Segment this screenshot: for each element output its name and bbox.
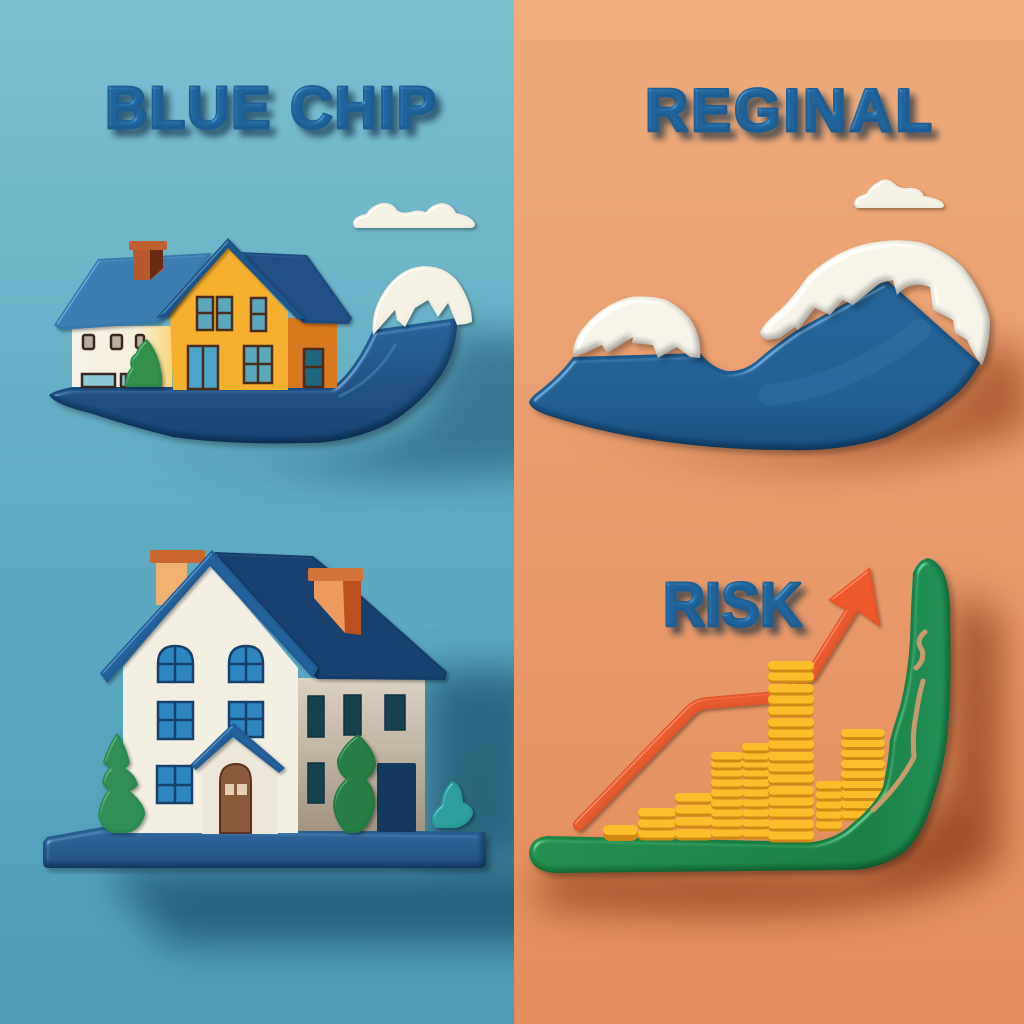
- left annex: [72, 326, 172, 387]
- panel: regional background: [514, 0, 1024, 1024]
- stack 2: [638, 808, 676, 840]
- right roof small: [228, 240, 352, 324]
- gable trim: [100, 550, 318, 683]
- arched windows: [157, 646, 263, 803]
- door: [220, 764, 251, 833]
- ramp tan streaks: [873, 632, 925, 810]
- illustration: small house on wave: [49, 238, 472, 443]
- icon: cloud left: [353, 203, 475, 228]
- windows yellow house: [188, 297, 323, 389]
- small shrub: [432, 781, 473, 828]
- stack 6 tall: [768, 661, 814, 842]
- big wave body: [529, 280, 980, 450]
- icon: cloud right: [854, 179, 944, 208]
- small tree: [125, 339, 162, 387]
- small wave foam: [573, 296, 700, 358]
- porch roof: [190, 723, 285, 773]
- arrow line: [579, 567, 880, 825]
- illustration: large house on shelf: [43, 550, 486, 868]
- cast shadows left panel: [100, 330, 560, 945]
- gable trim small: [156, 238, 304, 320]
- stack 5: [742, 743, 770, 840]
- stack 4: [711, 752, 743, 840]
- garage door: [377, 763, 416, 832]
- front coin stacks: [603, 661, 814, 842]
- heading: blue chip: BLUE CHIP: [105, 75, 436, 141]
- roof dark: [212, 552, 447, 680]
- yellow house: [170, 246, 288, 390]
- panel: blue chip background: [0, 0, 514, 1024]
- chimney left: [150, 550, 205, 605]
- chimney small: [129, 241, 167, 280]
- house front: [123, 563, 298, 833]
- wave highlight: [770, 330, 920, 395]
- house side wall: [298, 678, 425, 831]
- orange side wall: [288, 318, 337, 388]
- chimney right: [308, 568, 363, 635]
- left annex windows: [82, 335, 144, 387]
- chart: rising coins on green ramp: [529, 558, 951, 873]
- stack 3: [675, 793, 713, 840]
- left tree: [98, 733, 145, 833]
- big wave foam: [760, 240, 990, 365]
- wave under small house: [49, 318, 457, 443]
- wave foam small: [372, 266, 472, 335]
- illustration: big wave: [529, 240, 990, 450]
- green ramp: [529, 558, 951, 873]
- stack 1: [603, 825, 638, 841]
- left roof small: [54, 253, 212, 330]
- shelf: [43, 827, 486, 868]
- side windows: [308, 695, 405, 803]
- cast shadows right panel: [540, 340, 1024, 914]
- rear coin stacks: [816, 729, 885, 832]
- heading: risk: RISK: [663, 571, 802, 640]
- wave highlight streak: [340, 345, 395, 396]
- porch: [202, 735, 278, 834]
- heading: regional: REGINAL: [645, 77, 932, 144]
- right tree: [333, 734, 376, 833]
